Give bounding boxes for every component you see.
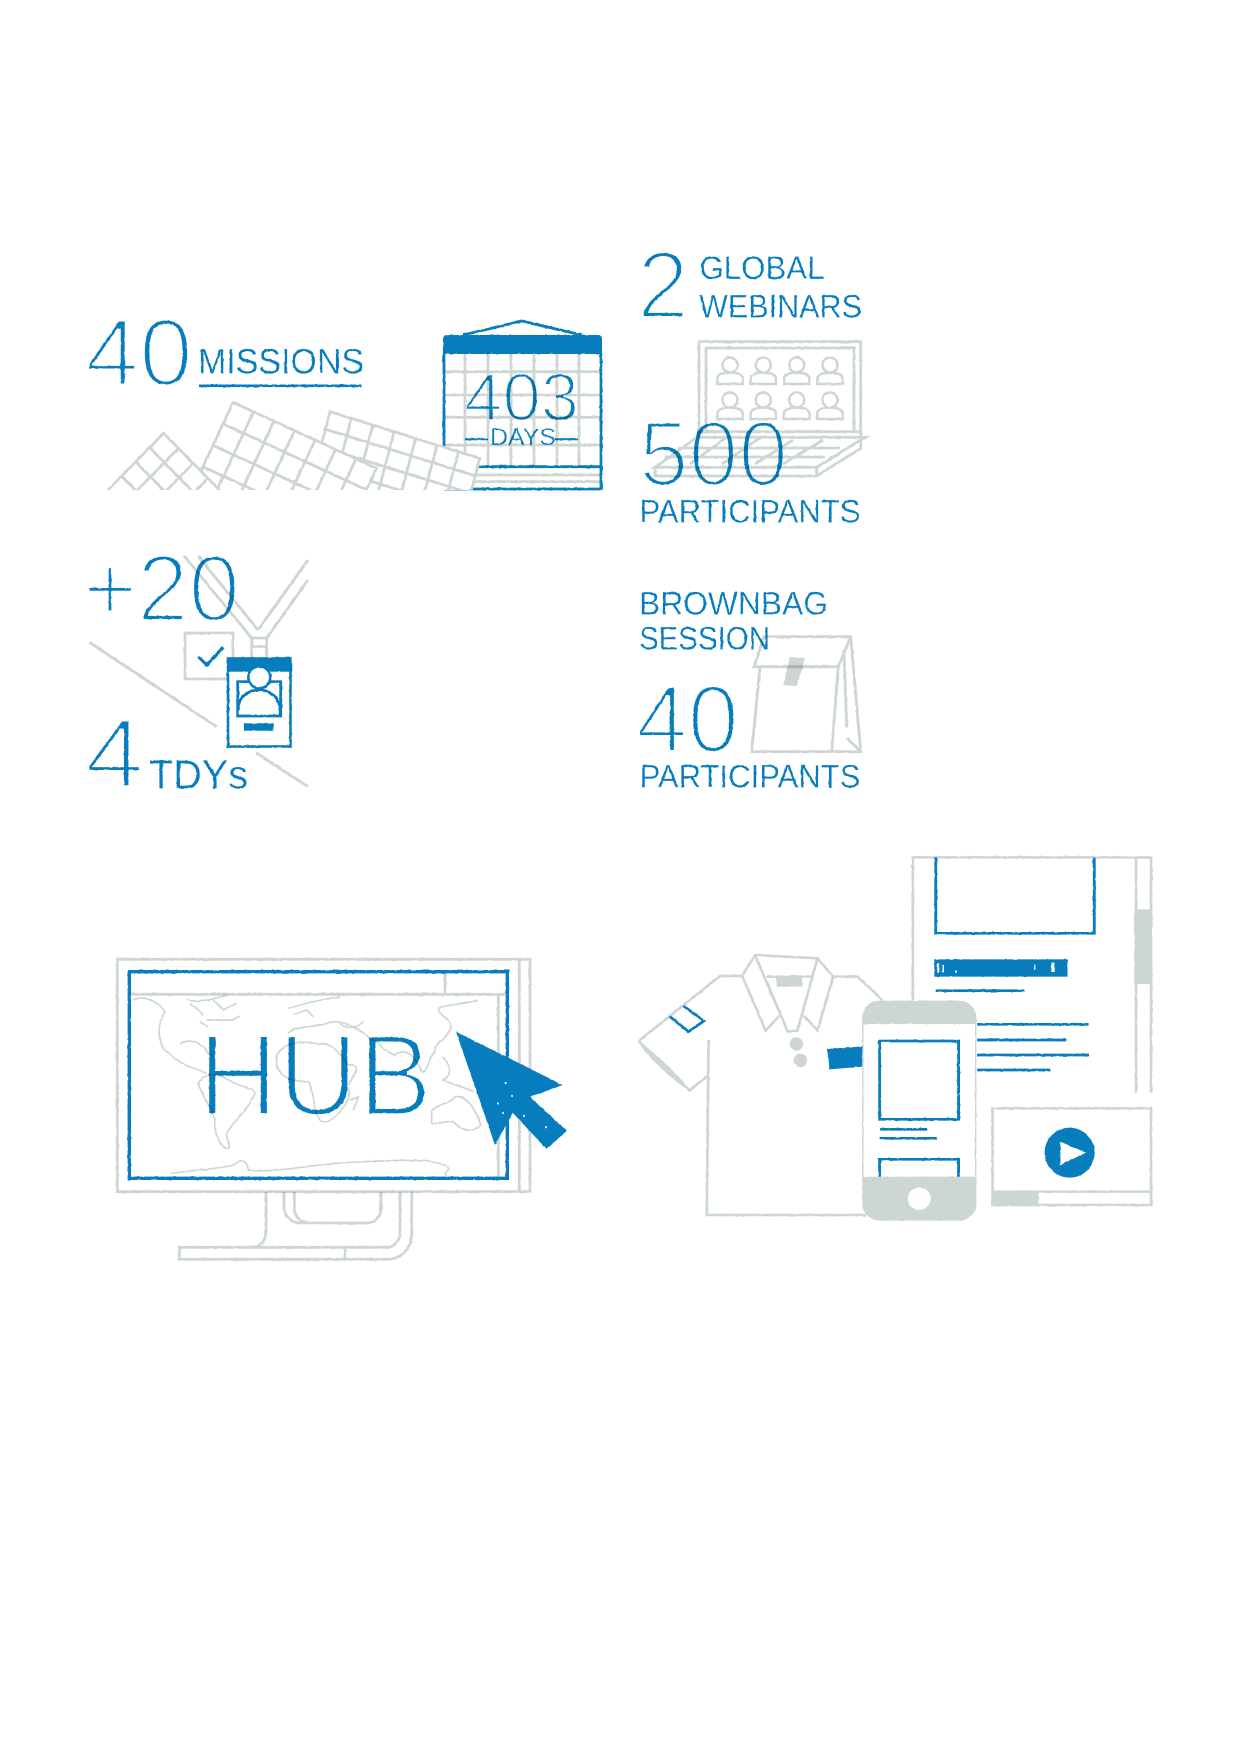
label: brownbag: BROWNBAG	[639, 585, 828, 621]
video frame	[992, 1108, 1151, 1205]
badge header	[227, 658, 291, 672]
phone second placeholder	[880, 1159, 959, 1177]
icon: smartphone	[862, 1001, 976, 1221]
label: missions: MISSIONS	[198, 342, 364, 381]
shirt pocket patch	[827, 1046, 863, 1069]
icon: checkbox	[185, 633, 233, 679]
icon: laptop	[655, 342, 865, 476]
stat: +20: +20	[83, 536, 240, 642]
document scrollbar	[1134, 909, 1151, 984]
map sheet left	[106, 431, 222, 490]
phone image placeholder	[880, 1041, 959, 1119]
panel: brownbag session	[636, 585, 861, 794]
play button	[1045, 1128, 1095, 1178]
stat: 2 webinars: 2	[637, 232, 689, 339]
calendar days count: 403	[464, 360, 579, 436]
monitor bezel	[117, 959, 530, 1192]
document text lines	[936, 991, 1089, 1070]
stat: 4: 4	[85, 699, 144, 809]
calendar days label: DAYS	[490, 424, 556, 451]
phone home button	[908, 1187, 931, 1210]
cursor texture	[497, 1082, 547, 1128]
icon: monitor	[117, 959, 530, 1259]
badge body	[228, 658, 290, 746]
panel: tdys	[83, 536, 308, 809]
label: participants: PARTICIPANTS	[640, 494, 860, 530]
label: tdys: TDYs	[149, 751, 248, 797]
calendar header	[443, 335, 602, 354]
calendar grid	[445, 354, 600, 482]
document heading texture	[937, 963, 1055, 973]
calendar frame	[444, 354, 601, 490]
phone screen	[864, 1024, 975, 1177]
shirt outline	[639, 955, 882, 1215]
icon: polo shirt	[639, 955, 882, 1215]
stat: 500: 500	[639, 402, 788, 506]
document image placeholder	[936, 857, 1094, 933]
map sheet middle	[200, 400, 378, 490]
document outline	[913, 857, 1151, 1093]
calendar days dashes	[465, 438, 578, 440]
map: australia	[432, 1097, 481, 1130]
bag outline	[752, 637, 861, 752]
monitor stand	[179, 1192, 412, 1259]
map: africa	[277, 1042, 356, 1122]
checkbox frame	[185, 633, 233, 679]
map: antarctica	[170, 1160, 449, 1176]
illustration: map sheets	[106, 400, 482, 490]
label: webinars: WEBINARS	[699, 288, 862, 324]
icon: video player	[992, 1108, 1151, 1205]
monitor screen frame	[129, 972, 507, 1178]
bag tape	[783, 657, 805, 686]
laptop screen	[699, 342, 861, 437]
icon: paper bag	[752, 637, 861, 752]
video progress bar	[992, 1192, 1039, 1205]
shirt sleeve patch	[670, 1006, 704, 1032]
badge name bar	[244, 723, 273, 731]
panel: hub	[117, 959, 567, 1259]
map: eurasia	[288, 997, 478, 1110]
shirt buttons	[790, 1037, 807, 1067]
phone body	[862, 1001, 976, 1221]
panel: missions	[89, 320, 603, 491]
webinar attendees	[717, 358, 843, 419]
label: session: SESSION	[639, 620, 770, 656]
laptop keyboard	[655, 437, 865, 476]
decorative diagonal paper edges	[89, 642, 308, 787]
shirt collar tag	[776, 977, 802, 987]
hub word: HUB	[198, 1010, 432, 1141]
panel: merchandise and media	[639, 857, 1151, 1221]
checkmark	[198, 647, 223, 665]
shirt sleeve cuff	[639, 1041, 690, 1091]
map: south america	[198, 1075, 255, 1148]
icon: world map	[133, 995, 481, 1176]
badge portrait head	[248, 666, 270, 688]
badge portrait shoulders	[238, 690, 280, 711]
icon: cursor arrow	[456, 1032, 567, 1149]
map: north america	[133, 995, 240, 1073]
icon: document page	[913, 857, 1151, 1093]
icon: lanyard	[184, 556, 308, 658]
calendar hanger	[463, 321, 582, 335]
label: global: GLOBAL	[700, 250, 824, 286]
panel: global webinars	[637, 232, 865, 530]
underline: missions	[199, 384, 362, 387]
icon: id badge	[227, 658, 291, 746]
document heading bar	[934, 959, 1067, 977]
stat: 40 participants: 40	[636, 666, 739, 773]
icon: calendar	[443, 321, 602, 490]
play triangle	[1060, 1142, 1086, 1165]
phone text lines	[880, 1129, 937, 1138]
badge photo frame	[238, 682, 281, 716]
label: participants: PARTICIPANTS	[640, 758, 860, 794]
stat: 40 missions number: 40	[85, 300, 193, 406]
map sheet right	[320, 410, 482, 490]
